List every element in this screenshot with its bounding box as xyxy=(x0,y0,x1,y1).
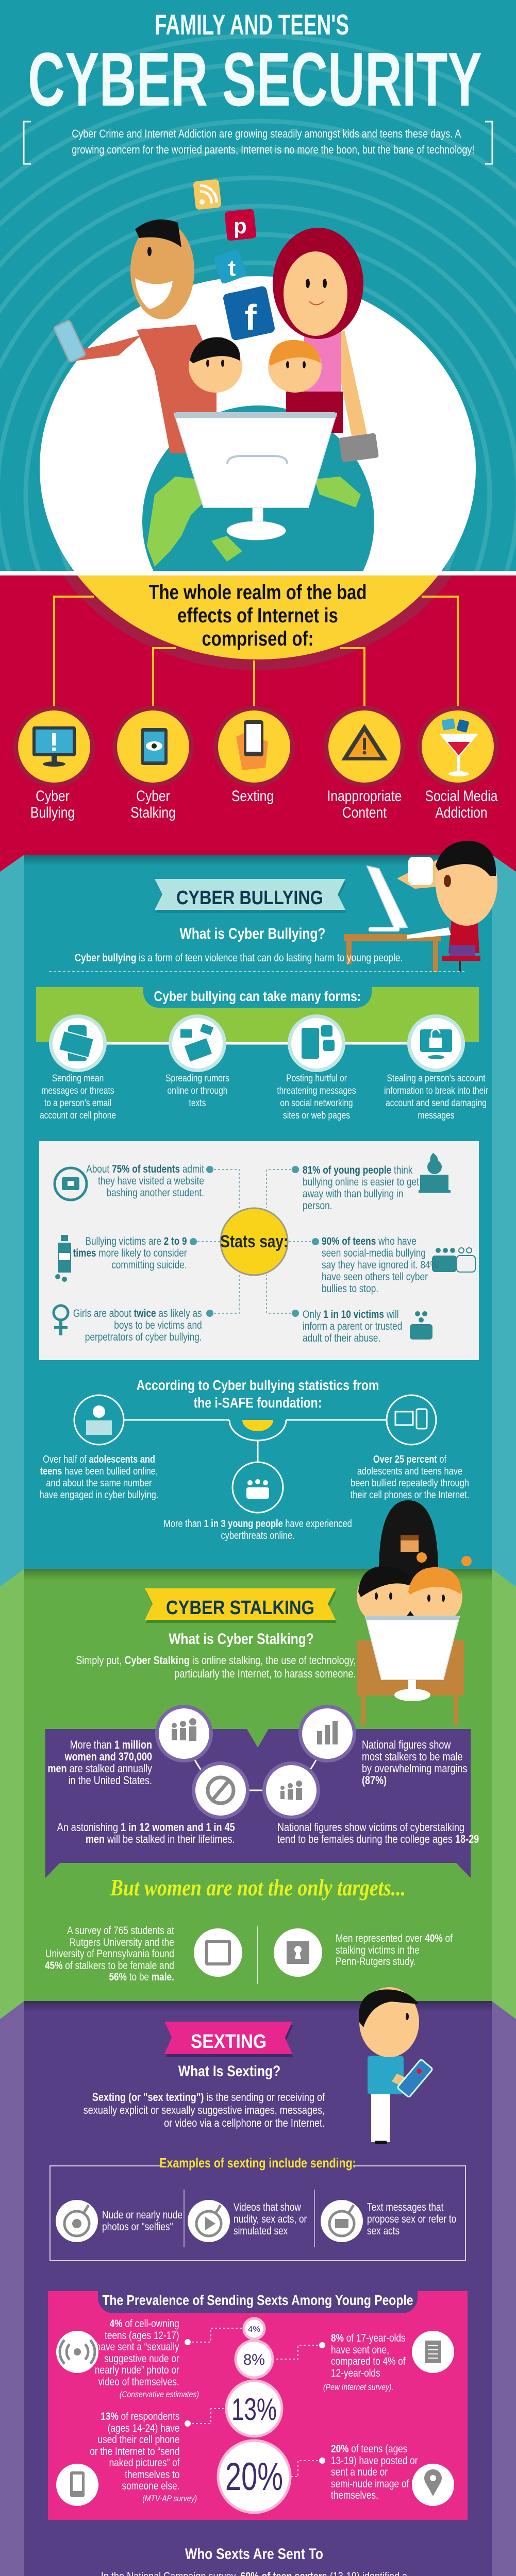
examples title: Examples of sexting include sending: xyxy=(159,2155,356,2171)
connectors to categories xyxy=(54,597,458,711)
intro text: Cyber Crime and Internet Addiction are growing steadily amongst kids and teens these days. A xyxy=(72,127,461,140)
text: An astonishing 1 in 12 women and 1 in 45 xyxy=(57,1821,235,1834)
category labels: Inappropriate xyxy=(327,788,402,805)
definition: sexting xyxy=(84,2091,325,2129)
text: (ages 14-24) have xyxy=(107,2422,179,2434)
definition: sexting: Sexting (or "sex texting") is the sending or receiving of xyxy=(92,2091,325,2104)
category labels: Content xyxy=(342,804,387,821)
forms captions: Posting hurtful or xyxy=(286,1073,347,1084)
examples items: Nude or nearly nude xyxy=(102,2209,182,2221)
prevalence panel: 4% xyxy=(248,2325,260,2334)
text: National figures show victims of cyberstalking xyxy=(277,1821,464,1834)
text: have sent one, xyxy=(331,2344,389,2355)
survey text: University of Pennsylvania found xyxy=(45,1948,174,1960)
i-SAFE stats: have engaged in cyber bullying. xyxy=(40,1489,158,1501)
definition: sexting: sexually explicit or sexually suggestive images, messages, xyxy=(84,2104,325,2116)
text: seen social-media bullying xyxy=(322,1247,426,1259)
heading: what is cyber stalking: What is Cyber Stalking? xyxy=(169,1631,314,1648)
category labels: Bullying xyxy=(30,804,75,821)
definition: cyber bullying: Cyber bullying is a form of teen violence that can do lasting harm to young people. xyxy=(75,952,403,964)
text: or the Internet to “send xyxy=(90,2445,179,2458)
i-SAFE stats: Over half of adolescents and xyxy=(43,1454,155,1465)
text: simulated sex xyxy=(234,2225,288,2237)
text: tend to be females during the college ages 18-29 xyxy=(277,1833,479,1845)
i-SAFE stats xyxy=(40,1454,158,1501)
banner: cyber bullying: CYBER BULLYING xyxy=(176,887,323,909)
banner: sexting xyxy=(164,2022,293,2057)
category labels: Cyber xyxy=(136,788,170,805)
heading: what is cyber bullying: What is Cyber Bullying? xyxy=(180,925,325,942)
text: say they have ignored it. 84% xyxy=(322,1259,438,1271)
text: themselves to xyxy=(125,2469,179,2480)
heading: whole realm: The whole realm of the bad xyxy=(149,581,367,604)
stats left: they have visited a website xyxy=(98,1175,204,1187)
intro text xyxy=(72,127,474,156)
category labels: Sexting xyxy=(231,788,274,805)
text: cyberthreats online. xyxy=(221,1530,295,1541)
i-SAFE stats: and about the same number xyxy=(46,1478,152,1489)
examples items: photos or "selfies" xyxy=(102,2221,173,2233)
text: by overwhelming margins xyxy=(362,1762,468,1775)
definition: sexting: or video via a cellphone or the Internet. xyxy=(164,2116,325,2129)
text: stalking victims in the xyxy=(336,1944,420,1956)
survey text: Rutgers University and the xyxy=(70,1936,174,1948)
text: times more likely to consider xyxy=(73,1247,187,1259)
prevalence texts: suggestive nude or xyxy=(104,2352,179,2365)
text: Penn-Rutgers study. xyxy=(336,1956,416,1968)
text: adult of their abuse. xyxy=(303,1332,380,1344)
heading: whole realm: comprised of: xyxy=(202,628,313,650)
stalking stats: More than 1 million xyxy=(70,1738,152,1751)
stalking stats xyxy=(47,1738,152,1787)
section backgrounds xyxy=(0,855,516,2576)
forms pill title: Cyber bullying can take many forms: xyxy=(154,988,361,1004)
text: themselves. xyxy=(331,2489,378,2501)
heading: women not only targets: But women are not the only targets... xyxy=(110,1874,406,1901)
stalking stats: in the United States. xyxy=(69,1774,152,1787)
text: bullies to stop. xyxy=(322,1283,378,1295)
survey icons xyxy=(194,1926,322,1984)
prevalence texts: 4% of cell-owning xyxy=(110,2318,179,2330)
category labels: Cyber xyxy=(36,788,70,805)
text: perpetrators of cyber bullying. xyxy=(85,1331,202,1343)
title: FAMILY AND TEEN'S xyxy=(155,8,349,41)
forms captions: to a person's email xyxy=(44,1098,111,1109)
stats left: About 75% of students admit xyxy=(86,1163,204,1175)
text: Only 1 in 10 victims will xyxy=(303,1309,399,1320)
prevalence panel xyxy=(48,2289,468,2520)
stats say label: Stats say: xyxy=(220,1232,288,1251)
forms captions: texts xyxy=(189,1098,206,1109)
category labels: Social Media xyxy=(425,788,497,805)
definition: cyber stalking: particularly the Internet, to harass someone. xyxy=(174,1667,356,1680)
prevalence title: The Prevalence of Sending Sexts Among Young People xyxy=(102,2292,413,2308)
heading: who sexts are sent to: Who Sexts Are Sent To xyxy=(185,2546,323,2563)
forms band xyxy=(36,972,479,1043)
stats right xyxy=(303,1164,419,1212)
banner: cyber stalking xyxy=(145,1588,337,1623)
text: 20% of teens (ages xyxy=(331,2443,407,2455)
definition: cyber stalking: Simply put, Cyber Stalking is online stalking, the use of technology, xyxy=(76,1654,356,1667)
definition: cyber stalking xyxy=(76,1654,356,1680)
text: 13-19) have posted or xyxy=(331,2454,418,2467)
stats right: 81% of young people think xyxy=(303,1164,412,1176)
category labels: Stalking xyxy=(130,804,176,821)
examples box xyxy=(50,2159,465,2261)
social icons xyxy=(193,179,276,341)
forms captions: Sending mean xyxy=(52,1073,104,1084)
text: nudity, sex acts, or xyxy=(234,2213,307,2225)
category labels: Addiction xyxy=(435,804,488,821)
text: (Conservative estimates) xyxy=(120,2389,199,2399)
heading: i-SAFE xyxy=(137,1377,379,1411)
banner: sexting: SEXTING xyxy=(191,2031,267,2053)
stats right: bullying online is easier to get xyxy=(303,1176,419,1188)
family illustration xyxy=(54,219,379,540)
text: sex acts xyxy=(367,2225,400,2237)
forms captions: online or through xyxy=(168,1086,227,1096)
text: Bullying victims are 2 to 9 xyxy=(86,1235,187,1247)
prevalence texts: video of themselves. xyxy=(98,2376,179,2387)
text: (Pew Internet survey). xyxy=(323,2382,393,2392)
stalking stats panel xyxy=(45,1705,471,1878)
forms captions: messages or threats xyxy=(41,1086,114,1096)
social icons: t xyxy=(228,256,236,281)
text: 12-year-olds xyxy=(331,2367,380,2379)
stats box xyxy=(39,1141,479,1360)
prevalence panel: 20% xyxy=(225,2455,283,2499)
stats icons xyxy=(54,1153,475,1340)
forms captions: Spreading rumors xyxy=(165,1073,229,1084)
text: Text messages that xyxy=(367,2201,443,2213)
prevalence texts: have sent a “sexually xyxy=(96,2341,179,2353)
text: adolescents and teens have xyxy=(357,1466,462,1477)
survey text: 45% of stalkers to be female and xyxy=(45,1960,174,1971)
survey text xyxy=(45,1925,174,1983)
prevalence texts: nearly nude” photo or xyxy=(95,2364,179,2376)
text: (87%) xyxy=(362,1774,387,1787)
text: been bullied repeatedly through xyxy=(351,1478,469,1489)
text: 90% of teens who have xyxy=(322,1235,417,1247)
text: National figures show xyxy=(362,1738,451,1751)
prevalence panel: 8% xyxy=(243,2351,265,2368)
text: inform a parent or trusted xyxy=(303,1320,402,1332)
i-SAFE diagram xyxy=(74,1395,436,1513)
heading: i-SAFE: the i-SAFE foundation: xyxy=(194,1395,322,1411)
text: Over 25 percent of xyxy=(373,1454,446,1465)
survey text: 56% to be male. xyxy=(109,1971,174,1983)
i-SAFE icons xyxy=(86,1405,427,1499)
illustration: boy with tablet xyxy=(359,1987,433,2144)
stats left: bashing another student. xyxy=(106,1187,204,1199)
illustration: hooded stalker and kids xyxy=(357,1500,472,1725)
intro text: growing concern for the worried parents, Internet is no more the boon, but the bane of technology! xyxy=(72,143,474,156)
survey text: A survey of 765 students at xyxy=(67,1925,174,1937)
text: Men represented over 40% of xyxy=(336,1933,453,1944)
text: More than 1 in 3 young people have experienced xyxy=(163,1518,352,1530)
central ellipse xyxy=(28,265,488,670)
text: 13% of respondents xyxy=(101,2411,179,2422)
text: their cell phones or the Internet. xyxy=(351,1489,469,1501)
forms captions: on social networking xyxy=(280,1098,353,1109)
icons: bullying forms xyxy=(49,1014,465,1072)
text: Videos that show xyxy=(234,2201,301,2213)
intro brackets xyxy=(24,122,492,164)
text: semi-nude image of xyxy=(331,2478,409,2489)
text: men will be stalked in their lifetimes. xyxy=(86,1833,235,1845)
heading: what is sexting: What Is Sexting? xyxy=(178,2063,280,2080)
prevalence texts: teens (ages 12-17) xyxy=(105,2330,179,2341)
text: someone else. xyxy=(122,2480,179,2492)
text: naked pictures” of xyxy=(109,2457,179,2469)
text: have seen others tell cyber xyxy=(322,1271,428,1283)
i-SAFE stats: teens have been bullied online, xyxy=(40,1466,158,1477)
forms captions: threatening messages xyxy=(277,1086,356,1096)
heading: i-SAFE: According to Cyber bullying statistics from xyxy=(137,1377,379,1393)
text: sent a nude or xyxy=(331,2466,388,2478)
banner: cyber bullying xyxy=(155,879,346,913)
prevalence texts xyxy=(95,2318,179,2387)
forms captions: Stealing a person's account xyxy=(387,1073,485,1084)
text: (MTV-AP survey) xyxy=(142,2494,197,2503)
social icons: f xyxy=(244,297,257,337)
forms captions: messages xyxy=(418,1110,455,1121)
stalking stats: women and 370,000 xyxy=(65,1750,152,1763)
forms captions: sites or web pages xyxy=(283,1110,350,1121)
prevalence panel: 13% xyxy=(231,2392,277,2427)
stats right: away with than bullying in xyxy=(303,1188,403,1200)
text: 8% of 17-year-olds xyxy=(331,2332,406,2344)
category labels xyxy=(30,788,498,821)
stats right: person. xyxy=(303,1200,332,1212)
heading: whole realm: effects of Internet is xyxy=(177,604,338,627)
text: committing suicide. xyxy=(112,1259,187,1271)
illustration: bullied boy at computer xyxy=(344,841,497,972)
text: boys to be victims and xyxy=(114,1319,202,1331)
forms captions xyxy=(40,1073,488,1121)
stalking stats: men are stalked annually xyxy=(47,1762,152,1775)
examples items xyxy=(102,2209,182,2233)
text: Girls are about twice as likely as xyxy=(73,1308,202,1319)
forms captions: account or cell phone xyxy=(40,1110,116,1121)
social icons: p xyxy=(234,214,247,238)
category circles xyxy=(13,706,498,787)
text: compared to 4% of xyxy=(331,2355,406,2367)
text: most stalkers to be male xyxy=(362,1750,463,1763)
stats left xyxy=(86,1163,204,1199)
text: used their cell phone xyxy=(97,2434,179,2446)
forms captions: account and send damaging xyxy=(386,1098,487,1109)
globe xyxy=(142,405,374,571)
heading: whole realm xyxy=(149,581,367,650)
forms captions: information to break into their xyxy=(384,1086,488,1096)
text: propose sex or refer to xyxy=(367,2213,456,2225)
banner: cyber stalking: CYBER STALKING xyxy=(166,1597,314,1619)
header background xyxy=(0,34,516,855)
